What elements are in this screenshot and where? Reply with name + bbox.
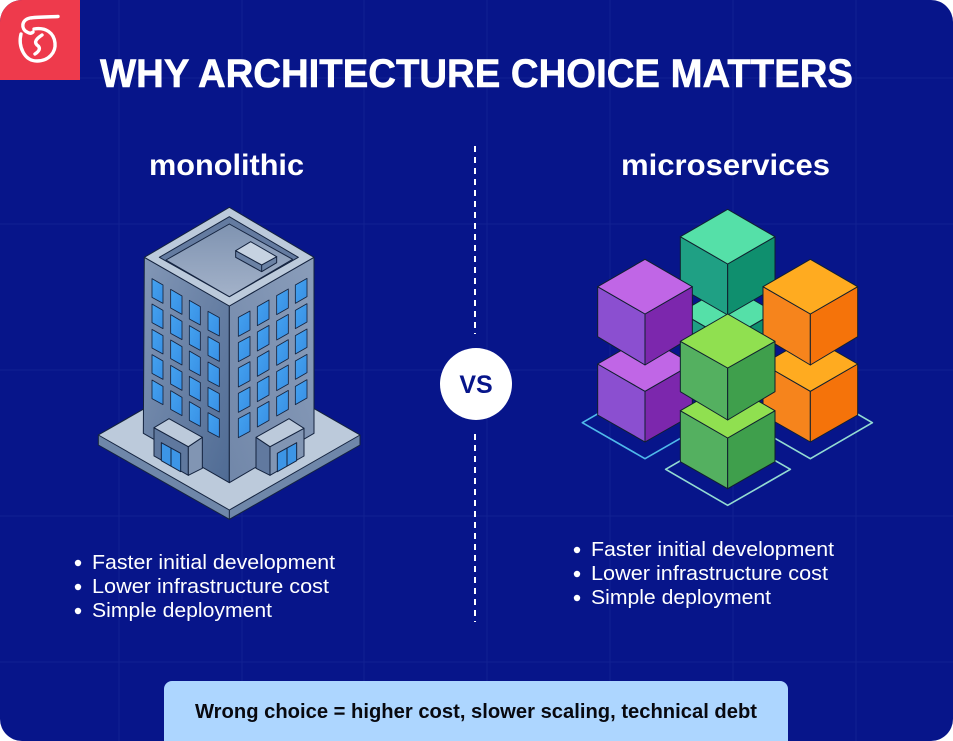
windows <box>152 278 307 438</box>
callout <box>164 681 788 741</box>
teal lower cube <box>680 300 762 356</box>
heading: microservices: microservices <box>621 149 830 182</box>
callout: Wrong choice = higher cost, slower scaling, technical debt <box>195 701 757 723</box>
purple upper cube <box>598 259 692 365</box>
list: microservices benefits: Simple deployment <box>591 587 771 609</box>
icon: monolithic building <box>98 207 360 519</box>
divider line <box>474 146 476 622</box>
green lower cube <box>680 401 776 490</box>
list: monolithic benefits: Simple deployment <box>92 600 272 622</box>
orange lower cube <box>762 350 858 442</box>
green upper cube <box>680 314 775 420</box>
list: monolithic benefits: Lower infrastructure cost <box>92 576 329 598</box>
teal upper cube <box>680 209 775 315</box>
list: monolithic benefits <box>75 552 335 622</box>
purple lower cube <box>597 350 693 442</box>
list: microservices benefits: Faster initial development <box>591 539 834 561</box>
heading: monolithic: monolithic <box>149 149 304 182</box>
list: microservices benefits: Lower infrastructure cost <box>591 563 828 585</box>
right entrance <box>256 419 304 475</box>
list: microservices benefits <box>574 539 834 609</box>
title: WHY ARCHITECTURE CHOICE MATTERS <box>100 52 853 96</box>
base outlines <box>582 413 874 506</box>
left entrance <box>154 419 202 475</box>
list: monolithic benefits: Faster initial development <box>92 552 335 574</box>
logo <box>0 0 80 80</box>
vs badge <box>440 348 512 420</box>
orange upper cube <box>763 259 858 365</box>
icon: microservices cubes <box>582 209 872 505</box>
vs badge: VS <box>459 371 493 399</box>
